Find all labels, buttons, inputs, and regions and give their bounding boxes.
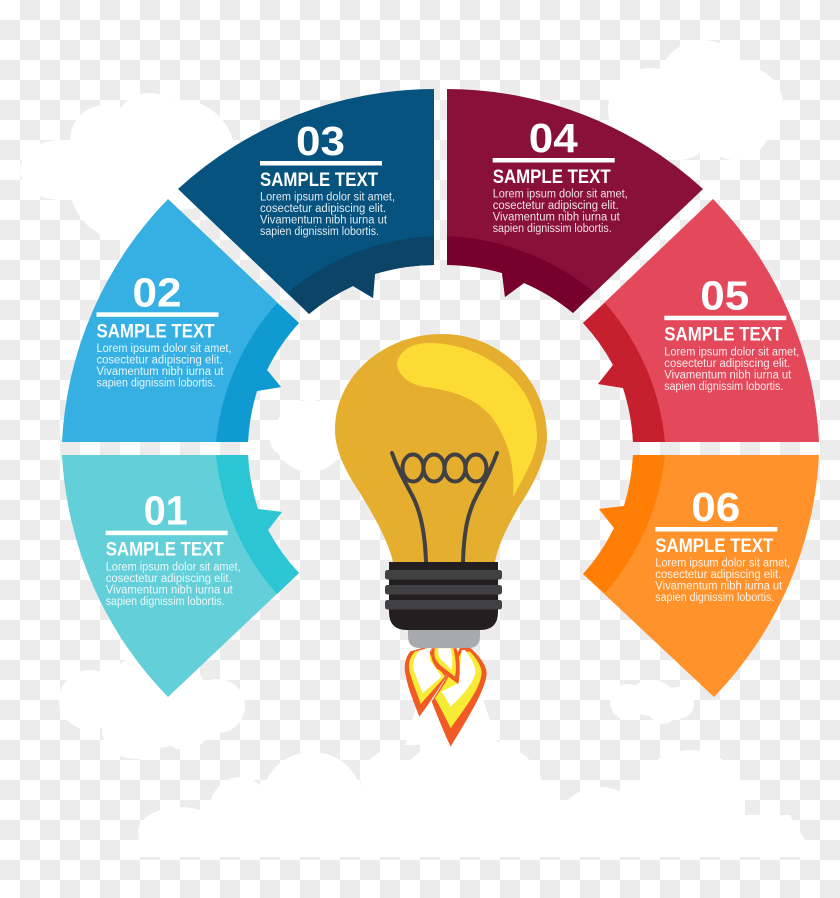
text block 05: Vivamentum nibh iurna ut xyxy=(664,369,792,381)
segment 01 inner band xyxy=(216,455,299,594)
text block 03: sapien dignissim lobortis. xyxy=(260,226,379,238)
text block 06: cosectetur adipiscing elit. xyxy=(655,569,781,581)
segment 05 shape xyxy=(583,199,819,442)
screw base xyxy=(389,562,498,630)
cloud: bottom right small xyxy=(610,680,694,724)
text block 04: Vivamentum nibh iurna ut xyxy=(493,212,620,224)
segment 06 shape xyxy=(583,455,819,697)
text block 06: 06 xyxy=(691,484,740,530)
text block 06: sapien dignissim lobortis. xyxy=(655,592,774,604)
cloud: top left xyxy=(20,93,235,240)
text block 06: Vivamentum nibh iurna ut xyxy=(655,581,783,593)
segment 04 inner band xyxy=(447,236,594,313)
text block 02: SAMPLE TEXT xyxy=(96,321,215,342)
panel: 02 xyxy=(62,199,299,442)
segment 03 shape xyxy=(178,89,434,314)
text block 03: cosectetur adipiscing elit. xyxy=(260,203,386,215)
text block 01 xyxy=(106,488,241,608)
text block 02: Lorem ipsum dolor sit amet, xyxy=(96,343,232,355)
text block 03: Vivamentum nibh iurna ut xyxy=(260,215,388,227)
text block 04: sapien dignissim lobortis. xyxy=(493,223,612,235)
text block 05: Lorem ipsum dolor sit amet, xyxy=(664,346,799,358)
text block 04 xyxy=(493,115,628,235)
panel: 01 xyxy=(62,455,299,697)
cloud: top right xyxy=(608,40,783,160)
text block 01: sapien dignissim lobortis. xyxy=(106,596,225,608)
text block 02: cosectetur adipiscing elit. xyxy=(96,354,222,366)
text block 02: Vivamentum nibh iurna ut xyxy=(96,366,224,378)
text block 06 xyxy=(655,484,790,604)
text block 04: 04 xyxy=(529,115,578,161)
panel: 03 xyxy=(178,89,434,314)
panel: 04 xyxy=(447,89,703,313)
text block 02: sapien dignissim lobortis. xyxy=(96,377,216,389)
text block 05: SAMPLE TEXT xyxy=(664,325,783,346)
segment 03 inner band xyxy=(288,236,434,314)
text block 06: Lorem ipsum dolor sit amet, xyxy=(655,558,790,570)
text block 05: 05 xyxy=(700,273,749,319)
text block 06: SAMPLE TEXT xyxy=(655,536,774,557)
text block 03: 03 xyxy=(296,118,345,164)
text block 02: 02 xyxy=(132,269,182,315)
text block 01: SAMPLE TEXT xyxy=(106,540,224,561)
segment 06 inner band xyxy=(583,455,665,593)
icon: rocket flames xyxy=(405,648,487,747)
text block 01: 01 xyxy=(144,488,188,534)
metal tip xyxy=(408,625,480,648)
text block 03: SAMPLE TEXT xyxy=(260,170,378,191)
panel: 06 xyxy=(583,455,819,697)
segment 02 shape xyxy=(62,199,299,442)
text block 04: cosectetur adipiscing elit. xyxy=(493,200,619,212)
text block 03 xyxy=(260,118,395,238)
text block 04: SAMPLE TEXT xyxy=(493,167,611,188)
bulb glass xyxy=(335,334,547,562)
text block 01: cosectetur adipiscing elit. xyxy=(106,573,232,585)
cloud: bottom left xyxy=(59,652,245,759)
segment 05 inner band xyxy=(583,303,665,442)
text block 05: cosectetur adipiscing elit. xyxy=(664,358,790,370)
text block 04: Lorem ipsum dolor sit amet, xyxy=(493,189,628,201)
base ridges xyxy=(385,570,502,610)
segment 04 shape xyxy=(447,89,703,313)
text block 03: Lorem ipsum dolor sit amet, xyxy=(260,192,395,204)
segment 02 inner band xyxy=(216,303,299,442)
cloud: centre left behind bulb xyxy=(270,400,346,472)
text block 05 xyxy=(664,273,799,393)
text block 01: Vivamentum nibh iurna ut xyxy=(106,584,233,596)
filament xyxy=(392,453,497,562)
icon: light bulb xyxy=(335,334,547,648)
text block 02 xyxy=(96,269,232,390)
panel: 05 xyxy=(583,199,819,442)
cloud: large ground smoke xyxy=(138,690,805,857)
text block 01: Lorem ipsum dolor sit amet, xyxy=(106,561,241,573)
segment 01 shape xyxy=(62,455,299,697)
text block 05: sapien dignissim lobortis. xyxy=(664,381,783,393)
bulb highlight xyxy=(397,343,537,497)
